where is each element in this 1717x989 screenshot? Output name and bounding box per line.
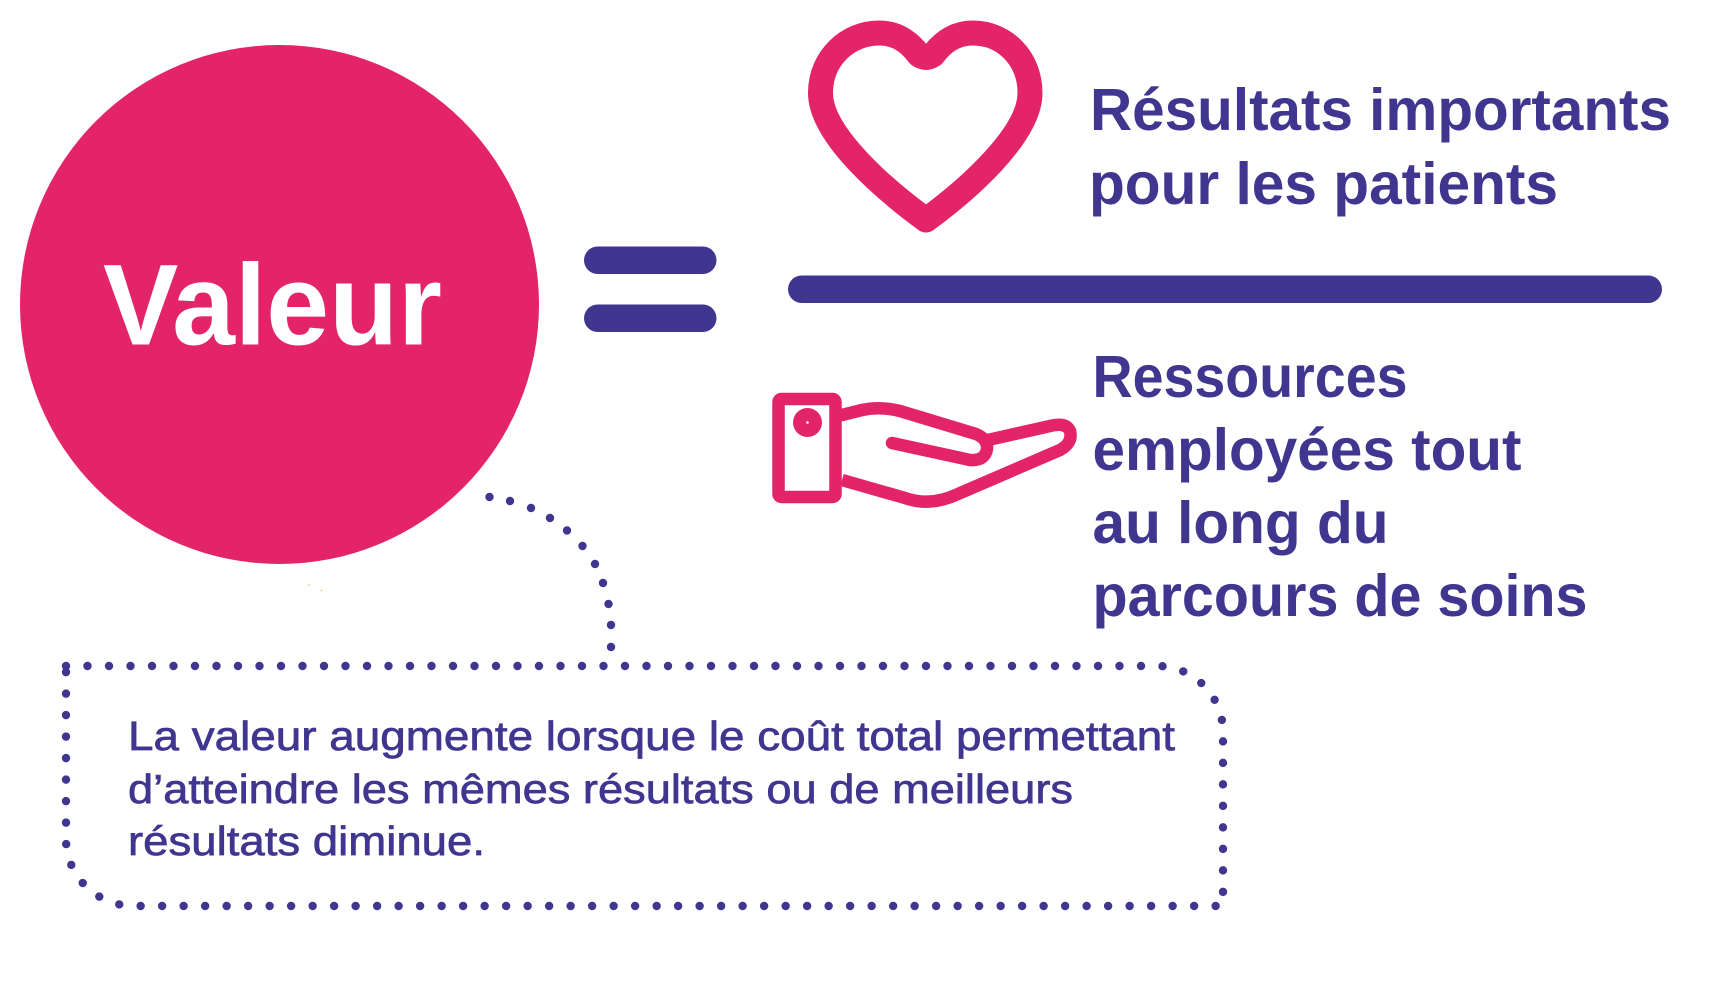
denominator text: resources used [1092, 344, 1588, 629]
numerator text: patient outcomes: Résultats importants [1090, 77, 1671, 143]
dotted connector [485, 493, 615, 651]
denominator text: resources used: employées tout [1092, 417, 1522, 483]
denominator text: resources used: Ressources [1092, 344, 1408, 410]
heading: Valeur: Valeur [103, 242, 442, 370]
panel: valeur circle [20, 45, 539, 564]
numerator text: patient outcomes: pour les patients [1089, 151, 1558, 217]
icon: heart [820, 33, 1030, 220]
denominator text: resources used: parcours de soins [1092, 563, 1588, 629]
icon: hand holding [778, 399, 1071, 502]
small specks [308, 584, 322, 591]
callout text: résultats diminue. [128, 818, 485, 864]
fraction bar [788, 276, 1662, 303]
denominator text: resources used: au long du [1092, 490, 1388, 556]
callout text [128, 713, 1176, 864]
icon: equals sign [584, 246, 716, 332]
callout box [66, 666, 1223, 906]
numerator text: patient outcomes [1089, 77, 1671, 217]
callout text: La valeur augmente lorsque le coût total permettant [128, 713, 1176, 759]
callout text: d’atteindre les mêmes résultats ou de meilleurs [128, 766, 1073, 812]
